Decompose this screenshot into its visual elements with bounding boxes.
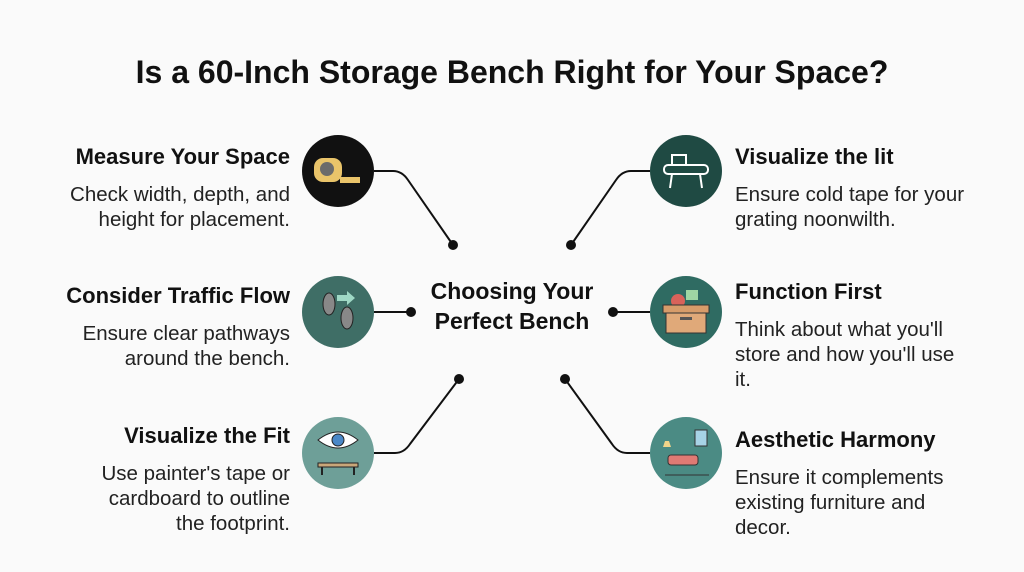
text: visualize lit (735, 144, 964, 231)
text: visualize lit: Visualize the lit (735, 144, 894, 169)
text: fit: Use painter's tape or (101, 462, 290, 485)
text: traffic: around the bench. (125, 347, 290, 370)
center label: Choosing Your (431, 278, 593, 304)
text: fit (101, 423, 290, 535)
text: fit: Visualize the Fit (124, 423, 290, 448)
center label: Perfect Bench (435, 308, 589, 334)
text: function (735, 279, 954, 391)
text: measure (70, 144, 290, 231)
text: aesthetic (735, 427, 944, 539)
text: traffic: Consider Traffic Flow (66, 283, 290, 308)
text: function: store and how you'll use (735, 343, 954, 366)
text: traffic: Ensure clear pathways (83, 322, 290, 345)
text: aesthetic: Ensure it complements (735, 466, 944, 489)
text: visualize lit: Ensure cold tape for your (735, 183, 964, 206)
text: function: Think about what you'll (735, 318, 943, 341)
text: aesthetic: existing furniture and (735, 491, 925, 514)
text: measure: Measure Your Space (76, 144, 290, 169)
text: measure: height for placement. (99, 208, 290, 231)
text: aesthetic: decor. (735, 516, 791, 539)
icon: bench (650, 135, 722, 207)
icon: footprints (302, 276, 374, 348)
text: aesthetic: Aesthetic Harmony (735, 427, 936, 452)
text: function: Function First (735, 279, 882, 304)
text: measure: Check width, depth, and (70, 183, 290, 206)
icon: tape measure (302, 135, 374, 207)
text: fit: the footprint. (176, 512, 290, 535)
title: Is a 60-Inch Storage Bench Right for Your Space? (136, 54, 888, 90)
center label (431, 278, 593, 334)
icon: storage box (650, 276, 722, 348)
icon: living room (650, 417, 722, 489)
text: visualize lit: grating noonwilth. (735, 208, 896, 231)
icon: eye and bench (302, 417, 374, 489)
text: fit: cardboard to outline (109, 487, 290, 510)
text: function: it. (735, 368, 751, 391)
text: traffic (66, 283, 290, 370)
